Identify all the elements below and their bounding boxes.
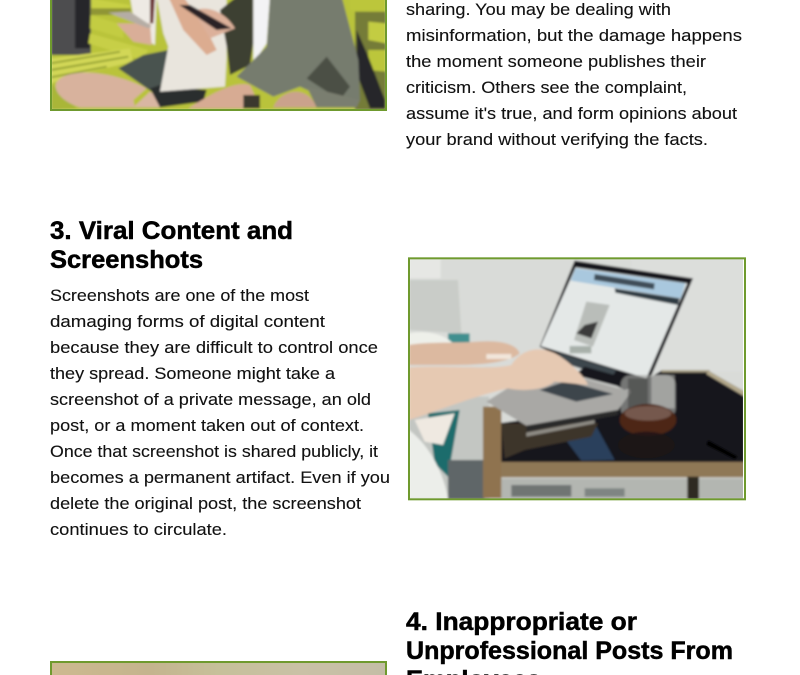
text: continuation of section 2: the moment someone publishes their (406, 52, 706, 71)
heading: section 3: 3. Viral Content and (50, 217, 293, 245)
text: continuation of section 2: criticism. Others see the complaint, (406, 78, 687, 97)
heading: section 4: 4. Inappropriate or (406, 608, 637, 636)
text: continuation of section 2 (406, 0, 742, 149)
text: section 3 body: delete the original post, the screenshot (50, 494, 361, 513)
text: section 3 body (50, 286, 390, 539)
photo: hands typing on a laptop at a glass table (409, 258, 745, 500)
text: section 3 body: Once that screenshot is shared publicly, it (50, 442, 378, 461)
text: section 3 body: because they are difficult to control once (50, 338, 378, 357)
text: continuation of section 2: misinformation, but the damage happens (406, 26, 742, 45)
text: continuation of section 2: assume it's true, and form opinions about (406, 104, 737, 123)
photo: people looking at phones on a yellow bench (51, 0, 386, 110)
photo: cropped top of section 4 image (51, 662, 386, 675)
text: continuation of section 2: sharing. You may be dealing with (406, 0, 671, 19)
heading: section 4 (406, 608, 733, 675)
text: section 3 body: continues to circulate. (50, 520, 227, 539)
text: section 3 body: post, or a moment taken out of context. (50, 416, 364, 435)
text: section 3 body: they spread. Someone might take a (50, 364, 336, 383)
heading: section 3 (50, 217, 293, 274)
text: continuation of section 2: your brand without verifying the facts. (406, 130, 708, 149)
text: section 3 body: Screenshots are one of the most (50, 286, 309, 305)
heading: section 3: Screenshots (50, 246, 203, 274)
heading: section 4: Unprofessional Posts From (406, 637, 733, 665)
text: section 3 body: screenshot of a private message, an old (50, 390, 371, 409)
text: section 3 body: damaging forms of digital content (50, 312, 325, 331)
text: section 3 body: becomes a permanent artifact. Even if you (50, 468, 390, 487)
